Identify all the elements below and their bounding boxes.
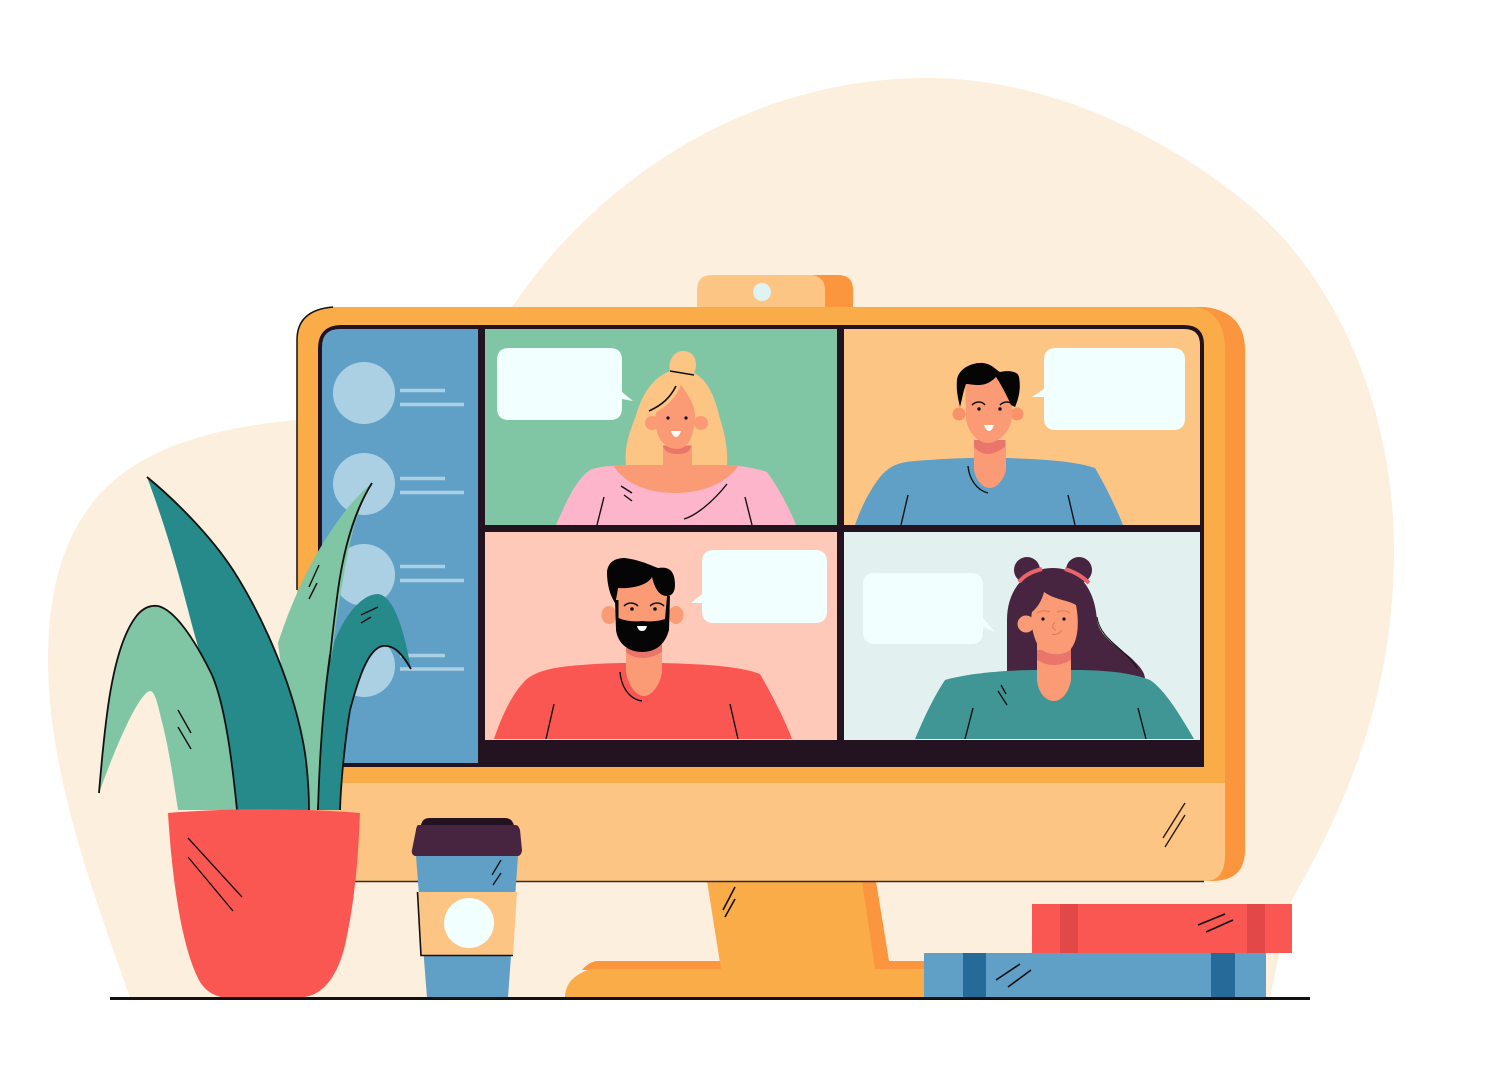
beard (615, 596, 670, 652)
background blob (48, 78, 1394, 998)
body (556, 466, 796, 525)
hair (957, 363, 1020, 407)
speech bubble (863, 573, 995, 644)
stack of books (924, 904, 1292, 998)
monitor body (297, 307, 1245, 882)
panel: bearded man on pink (485, 532, 837, 740)
face (1031, 592, 1078, 654)
speech bubble (691, 550, 827, 623)
hair (607, 558, 675, 603)
face (965, 378, 1012, 443)
plant pot (168, 809, 360, 998)
blue book (924, 953, 1266, 998)
neck (626, 640, 662, 696)
cup lid (421, 818, 514, 826)
desk line (110, 997, 1310, 1000)
ears (952, 408, 966, 420)
hair (626, 351, 727, 466)
face (655, 385, 695, 449)
coffee cup (412, 818, 522, 998)
monitor stand (565, 881, 925, 998)
plant (99, 477, 411, 810)
neck (974, 440, 1006, 488)
ears and face (602, 606, 616, 624)
panel: woman with bun on green (485, 329, 837, 525)
body (915, 670, 1194, 739)
cup sleeve (418, 892, 517, 955)
monitor screen (318, 325, 1204, 767)
webcam (697, 275, 853, 309)
neck and chest (613, 445, 739, 493)
hair (1007, 557, 1145, 678)
panel: participant sidebar (322, 329, 478, 763)
body (855, 458, 1123, 525)
panel: woman with buns on pale blue (844, 532, 1200, 740)
neck (1037, 640, 1071, 701)
body (494, 663, 792, 739)
leaf: right green (278, 483, 372, 810)
panel: man on orange (844, 329, 1200, 525)
leaf: big teal (147, 477, 309, 810)
leaf: right teal (318, 594, 411, 810)
red book (1032, 904, 1292, 953)
speech bubble (497, 348, 633, 420)
leaf: left green (99, 606, 237, 810)
speech bubble (1032, 348, 1185, 430)
